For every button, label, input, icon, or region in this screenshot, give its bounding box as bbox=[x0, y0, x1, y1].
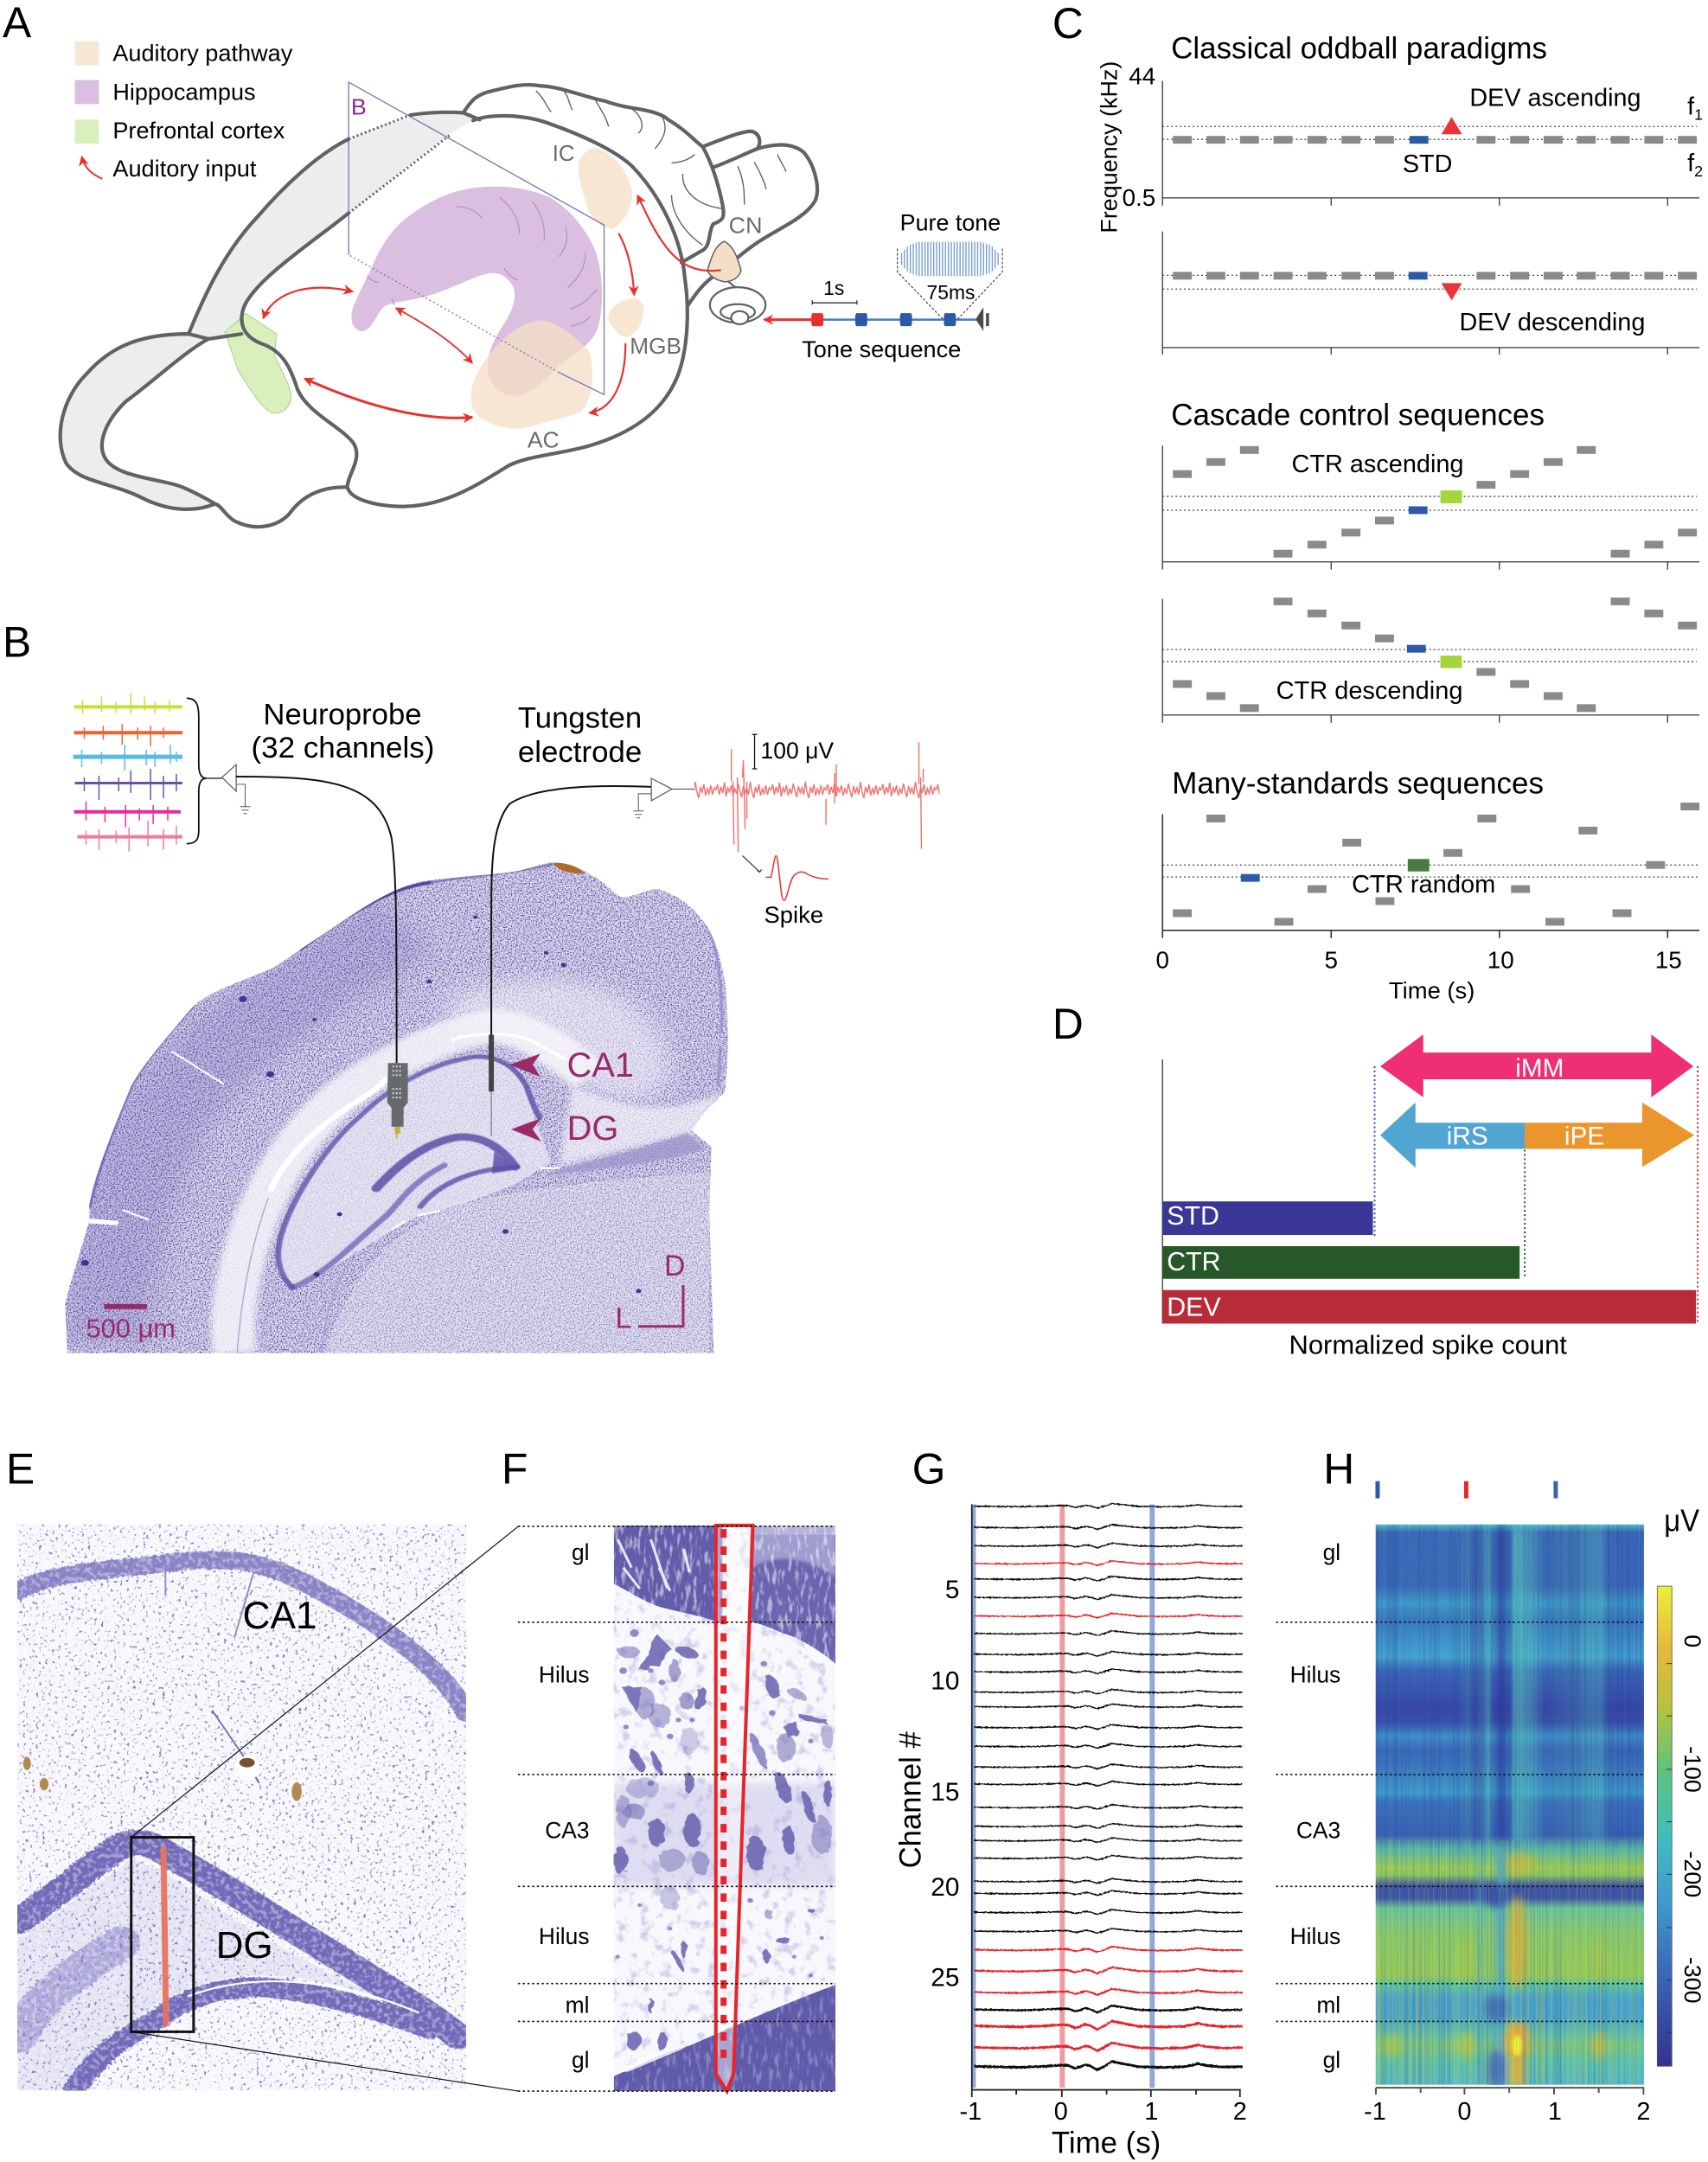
tone sequence schematic: Pure tone bbox=[900, 210, 1001, 236]
region label AC: AC bbox=[528, 428, 560, 452]
colour bar unit: μV bbox=[1664, 1503, 1699, 1538]
label: DG: DG bbox=[567, 1110, 618, 1148]
text: electrode: electrode bbox=[518, 736, 642, 769]
colour bar tick labels: -200 bbox=[1679, 1851, 1705, 1897]
chart: CTR ascending bbox=[1162, 445, 1699, 570]
layer labels: Hilus bbox=[539, 1661, 590, 1687]
orientation marker: D bbox=[664, 1250, 685, 1282]
histology image bbox=[17, 1525, 466, 2090]
colour bar tick labels: -300 bbox=[1679, 1957, 1705, 2004]
layer labels: Hilus bbox=[1290, 1923, 1340, 1949]
channel tick labels: 5 bbox=[945, 1576, 959, 1604]
chart: CTR random: 5 bbox=[1325, 947, 1338, 974]
brain outlines bbox=[61, 85, 817, 527]
region label CN: CN bbox=[729, 214, 762, 239]
chart: DEV ascending: f bbox=[1687, 93, 1694, 120]
heatmap bbox=[1376, 1525, 1644, 2090]
region: prefrontal cortex bbox=[225, 313, 291, 413]
layer labels: gl bbox=[1323, 1539, 1340, 1565]
bar CTR bbox=[1162, 1246, 1519, 1279]
x axis label: Normalized spike count bbox=[1289, 1329, 1567, 1359]
pure tone waveform bbox=[900, 242, 1000, 276]
panel D: normalized spike count bars bbox=[1052, 1000, 1698, 1359]
text: Spike: Spike bbox=[764, 902, 823, 928]
hippocampus folds bbox=[368, 197, 597, 326]
LFP traces bbox=[974, 1504, 1243, 2070]
multichannel traces bbox=[74, 693, 182, 852]
recording sites bbox=[719, 1529, 728, 2060]
chart: CTR descending bbox=[1162, 598, 1699, 723]
tone sequence schematic bbox=[764, 210, 1002, 362]
colour bar bbox=[1657, 1586, 1672, 2066]
time tick labels: 1 bbox=[1144, 2098, 1158, 2126]
amplifier and wire: neuroprobe bbox=[207, 764, 397, 1063]
500 micron scale bar bbox=[104, 1304, 147, 1309]
arrowhead: DG bbox=[511, 1118, 541, 1142]
chart: CTR random bbox=[1156, 803, 1699, 1003]
panel letter H: H bbox=[1323, 1445, 1354, 1494]
label DG: DG bbox=[216, 1924, 272, 1967]
tick label 44: 44 bbox=[1129, 63, 1155, 90]
orientation marker: L bbox=[615, 1302, 631, 1335]
panel letter G: G bbox=[912, 1445, 945, 1494]
icon: neuroprobe bbox=[387, 1063, 408, 1139]
panel B foreground annotations: 100 μV bbox=[760, 738, 834, 764]
time tick labels: 0 bbox=[1054, 2098, 1068, 2126]
y axis label: Frequency (kHz) bbox=[1097, 61, 1123, 233]
icon: speaker bbox=[976, 307, 989, 331]
chart: DEV ascending: STD bbox=[1403, 150, 1453, 178]
region label MGB: MGB bbox=[630, 335, 681, 359]
label CA1: CA1 bbox=[243, 1595, 317, 1637]
arrow iPE bbox=[1525, 1103, 1694, 1167]
arrow iRS bbox=[1380, 1103, 1525, 1167]
time tick labels: 1 bbox=[1548, 2098, 1562, 2126]
chart: DEV descending bbox=[1162, 232, 1699, 355]
time tick labels bbox=[1364, 2098, 1650, 2126]
channel tick labels: 15 bbox=[931, 1778, 959, 1807]
arrowhead: CA1 bbox=[509, 1053, 541, 1077]
layer labels: gl bbox=[1323, 2047, 1340, 2073]
panel letter E: E bbox=[6, 1445, 35, 1494]
heatmap x axis bbox=[1376, 2088, 1644, 2095]
chart: CTR ascending: CTR ascending bbox=[1291, 451, 1463, 478]
panel B: recording setup on brain section bbox=[3, 618, 939, 1366]
dotted guide lines bbox=[1375, 1066, 1698, 1323]
plane label B: B bbox=[351, 95, 367, 119]
tick label 0.5: 0.5 bbox=[1123, 184, 1155, 211]
chart: CTR random: Time (s) bbox=[1389, 977, 1475, 1003]
chart: CTR random: 15 bbox=[1655, 947, 1682, 974]
layer labels: Hilus bbox=[1290, 1661, 1340, 1687]
layer labels bbox=[539, 1539, 590, 2073]
channel tick labels: 10 bbox=[931, 1666, 959, 1695]
axis line bbox=[1161, 1059, 1163, 1324]
layer labels: Hilus bbox=[539, 1923, 590, 1949]
icon: cochlea bbox=[710, 281, 765, 324]
dark stained vessels bbox=[81, 915, 642, 1293]
chart: DEV descending: DEV descending bbox=[1460, 309, 1645, 336]
chart: DEV ascending: f bbox=[1687, 150, 1694, 177]
histology zoom image bbox=[613, 1526, 835, 2091]
chart: CTR random: CTR random bbox=[1352, 871, 1495, 899]
legend: Auditory input bbox=[112, 156, 257, 182]
bar STD bbox=[1162, 1201, 1373, 1235]
legend: Auditory pathway bbox=[112, 41, 293, 67]
electrode track bbox=[163, 1847, 166, 2025]
layer labels: CA3 bbox=[1296, 1818, 1340, 1844]
recorded spike trace bbox=[694, 742, 939, 853]
legend: Prefrontal cortex bbox=[112, 118, 285, 144]
region: auditory cortex bbox=[471, 321, 592, 429]
spike waveform inset bbox=[743, 856, 828, 900]
region: hippocampus bbox=[351, 187, 602, 396]
text: Neuroprobe: Neuroprobe bbox=[263, 698, 422, 731]
bar DEV bbox=[1162, 1290, 1696, 1324]
x axis label: Time (s) bbox=[1052, 2127, 1161, 2160]
panel G: channel traces bbox=[894, 1445, 1247, 2160]
panel letter C: C bbox=[1052, 0, 1084, 48]
channel tick labels: 25 bbox=[931, 1964, 959, 1992]
brain outline and regions bbox=[61, 82, 817, 527]
chart: DEV ascending bbox=[1162, 81, 1703, 206]
panel E: dentate gyrus micrograph bbox=[6, 1445, 518, 2091]
panel letter D: D bbox=[1052, 1000, 1084, 1048]
channel tick labels: 20 bbox=[931, 1873, 959, 1902]
panel letter B: B bbox=[3, 618, 31, 667]
chart: DEV ascending: 1 bbox=[1694, 106, 1703, 123]
arrow iPE: iPE bbox=[1564, 1123, 1604, 1151]
stimulus bands bbox=[971, 1505, 1155, 2088]
chart: CTR random: 0 bbox=[1156, 947, 1169, 974]
region: MGB bbox=[608, 298, 644, 337]
panel B foreground annotations bbox=[3, 618, 939, 1344]
layer labels: ml bbox=[1316, 1992, 1340, 2018]
many-standards sequences bbox=[1156, 767, 1699, 1003]
colour bar tick labels: -100 bbox=[1679, 1746, 1705, 1793]
tone sequence schematic: 1s bbox=[823, 277, 844, 299]
arrow iRS: iRS bbox=[1447, 1123, 1488, 1151]
time tick labels: 0 bbox=[1457, 2098, 1471, 2126]
chart: DEV ascending: DEV ascending bbox=[1469, 84, 1641, 112]
panel H: current source heatmap bbox=[1276, 1445, 1705, 2126]
stimulus markers bbox=[1375, 1481, 1558, 1499]
colour bar tick labels: 0 bbox=[1679, 1634, 1705, 1647]
layer labels: gl bbox=[572, 1539, 590, 1565]
inset rectangle and zoom lines bbox=[131, 1526, 518, 2091]
layer labels bbox=[1290, 1539, 1340, 2073]
legend bbox=[75, 41, 293, 182]
title: classical oddball: Classical oddball paradigms bbox=[1171, 32, 1547, 66]
brace bbox=[187, 698, 207, 844]
region: cochlear nucleus bbox=[707, 241, 741, 282]
text: channels: (32 channels) bbox=[252, 732, 434, 764]
classical and cascade sequences bbox=[1052, 0, 1703, 723]
title: many-standards: Many-standards sequences bbox=[1172, 767, 1544, 801]
time tick labels bbox=[960, 2098, 1247, 2126]
hippocampal cell layers bbox=[278, 1057, 540, 1288]
label: CA1: CA1 bbox=[567, 1046, 634, 1084]
region label IC: IC bbox=[553, 142, 575, 166]
bar STD: STD bbox=[1167, 1202, 1219, 1231]
vessels bbox=[23, 1757, 302, 1801]
layer labels: ml bbox=[566, 1992, 590, 2018]
channel tick labels bbox=[931, 1576, 959, 1992]
colour bar tick labels bbox=[1679, 1634, 1705, 2004]
time tick labels: 2 bbox=[1636, 2098, 1650, 2126]
chart: CTR descending: CTR descending bbox=[1276, 677, 1462, 705]
histology: coronal brain section bbox=[52, 848, 744, 1366]
probe track outline bbox=[716, 1526, 753, 2091]
legend: Hippocampus bbox=[112, 79, 255, 105]
amplifier and wire: tungsten electrode bbox=[489, 778, 694, 1136]
panel F: layer-resolved electrode track bbox=[502, 1445, 835, 2091]
cerebellar folia bbox=[536, 89, 786, 245]
y axis label: Channel # bbox=[894, 1731, 928, 1868]
plane B bbox=[349, 82, 605, 394]
panel C: stimulus paradigms bbox=[1052, 0, 1703, 1003]
time tick labels: 2 bbox=[1233, 2098, 1247, 2126]
arrow iMM bbox=[1380, 1034, 1693, 1097]
surface vessel bbox=[553, 863, 585, 873]
layer labels: CA3 bbox=[545, 1818, 590, 1844]
axes bbox=[972, 1505, 1241, 2097]
panel letter F: F bbox=[502, 1445, 528, 1494]
arrow iMM: iMM bbox=[1515, 1054, 1564, 1083]
dotted section lines bbox=[349, 115, 450, 213]
one second scale bar bbox=[812, 300, 857, 304]
red connection arrows bbox=[263, 195, 721, 418]
text: Tungsten: Tungsten bbox=[518, 701, 642, 734]
layer dotted lines bbox=[1276, 1622, 1644, 2021]
chart: DEV ascending: 2 bbox=[1694, 163, 1703, 180]
tone sequence schematic: Tone sequence bbox=[802, 336, 961, 362]
chart: CTR random: 10 bbox=[1487, 947, 1514, 974]
100 microvolt scale bbox=[752, 734, 758, 769]
time tick labels: -1 bbox=[1364, 2098, 1386, 2126]
scale label: 500 μm bbox=[86, 1314, 176, 1344]
panel A: auditory pathway brain schematic bbox=[3, 0, 1002, 527]
tone sequence schematic: 75ms bbox=[927, 281, 975, 304]
time tick labels: -1 bbox=[960, 2098, 982, 2126]
orientation marker bbox=[615, 1250, 685, 1335]
bar CTR: CTR bbox=[1167, 1248, 1221, 1276]
title: cascade control: Cascade control sequences bbox=[1171, 398, 1545, 432]
bar DEV: DEV bbox=[1167, 1294, 1221, 1322]
layer labels: gl bbox=[572, 2047, 590, 2073]
region: inferior colliculus bbox=[579, 148, 632, 229]
layer dotted lines bbox=[518, 1526, 835, 2091]
